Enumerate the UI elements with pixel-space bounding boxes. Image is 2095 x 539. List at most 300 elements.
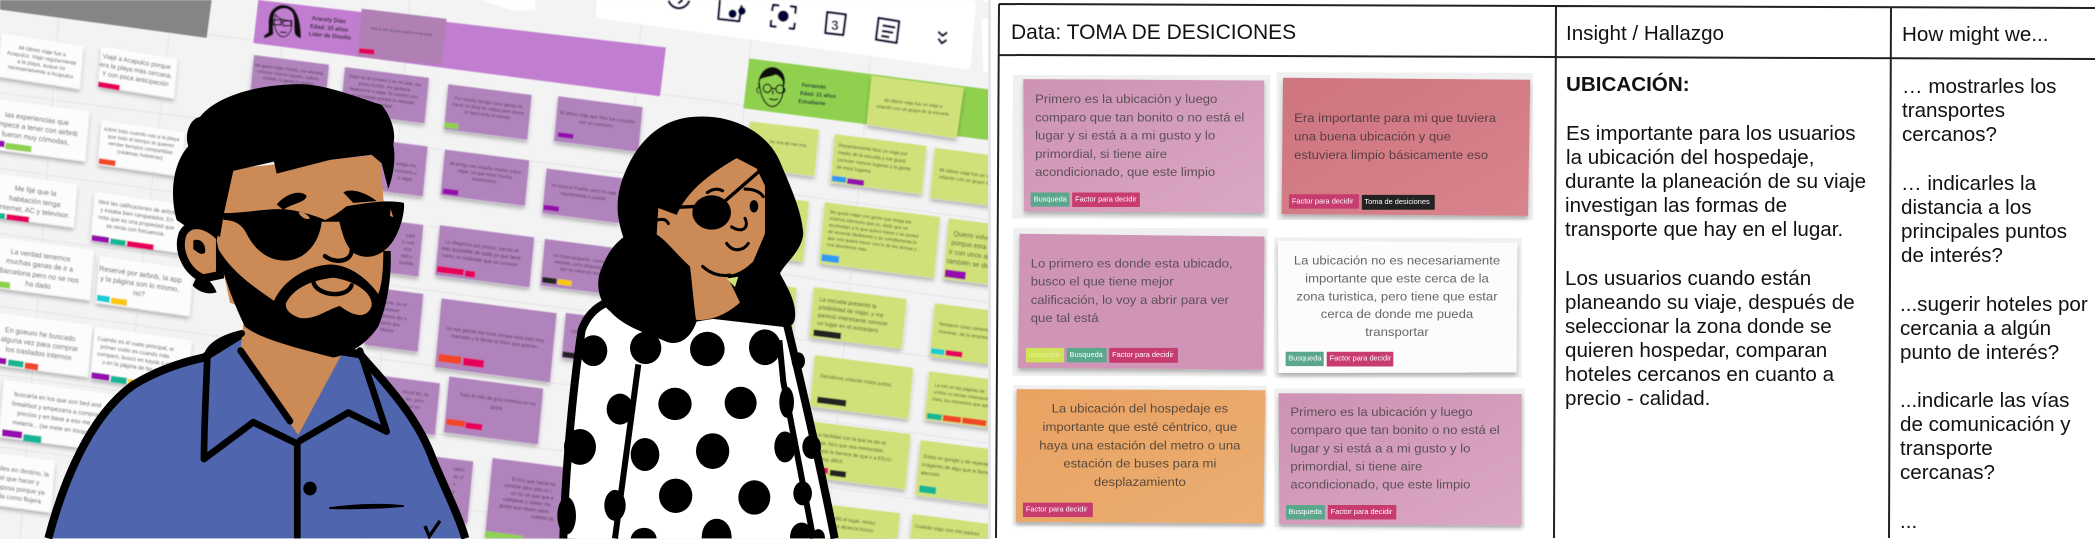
sticky note: purple P2: gusta mucho, me gustaría xyxy=(358,81,411,93)
sticky note: green G9: Rentaron unas camionetas para xyxy=(939,321,1008,336)
man: neck xyxy=(240,323,360,435)
sticky note: purple Q3: que la cama es muy xyxy=(559,266,602,278)
sticky note: purple P6: nda y xyxy=(401,253,413,260)
quote card 6: acondicionado, que este limpio xyxy=(1290,478,1470,491)
sticky note: white A7: des en destino, la xyxy=(0,465,50,479)
sticky note: green G3: Mi último viaje fue un viaje a xyxy=(939,167,1001,181)
how might we text: principales puntos xyxy=(1901,220,2067,243)
persona banner: Fernando xyxy=(743,58,989,140)
sticky note: purple P3 xyxy=(444,84,532,140)
sticky note: purple P3: lo hace todo el mundo xyxy=(464,109,511,121)
sticky note: purple P12: do el xyxy=(453,474,464,481)
sticky note: purple Q1: por un concierto. xyxy=(579,119,614,130)
illustration: man with sunglasses xyxy=(48,84,465,538)
sticky note: green G12: La facilidad con la que se dio el xyxy=(816,432,886,447)
quote card 5: La ubicación del hospedaje es xyxy=(1052,402,1228,415)
persona banner: Fernando: Estudiante xyxy=(798,99,826,107)
man: collar and shirt lines xyxy=(204,333,387,538)
quote card 4: zona turistica, pero tiene que estar xyxy=(1296,290,1498,303)
quote card 4: La ubicación no es necesariamente xyxy=(1294,254,1500,268)
sticky note: white A5 xyxy=(0,313,93,377)
sticky note: green G2: conocer nuevos lugares y la gente xyxy=(837,157,911,173)
quote card 5: importante que esté céntrico, que xyxy=(1043,421,1237,434)
sticky note: purple P2: para viajar. xyxy=(371,101,394,109)
sticky note: purple P13: gusta que vayan parto xyxy=(499,503,549,515)
sticky note: white A4: Barcelona pero no se nos xyxy=(0,266,79,285)
sticky note: green G7 xyxy=(752,283,797,339)
sticky note: purple P1: Me gusta viajar mucho, me encanta xyxy=(255,62,324,76)
sticky note: purple P7: más accesible de cada ya que tiene xyxy=(441,246,521,262)
sticky note: green G15: Cuando viajo con mis padres xyxy=(914,523,980,538)
quote card 4: Factor para decidir xyxy=(1330,355,1392,363)
sticky note: green G5: acomodan a lo que quiero hacer o se ponen xyxy=(829,222,919,239)
persona banner: Aracely: Aracely Días xyxy=(311,16,346,25)
column header: Insight: Insight / Hallazgo xyxy=(1566,22,1724,45)
sticky note: green G11 xyxy=(925,371,1019,431)
sticky note: purple P2: dedicarme a viajar. El número uno xyxy=(349,86,418,100)
quote card 3: Lo primero es donde esta ubicado, xyxy=(1031,257,1233,270)
insight text: quieren hospedar, comparan xyxy=(1565,339,1827,362)
sticky note: white A1: a la playa, auque no xyxy=(17,59,65,72)
woman: facial lines xyxy=(657,189,763,275)
sticky note: green G5: mismos intereses que yo, dado que se xyxy=(829,216,909,231)
quote card 2: una buena ubicación y que xyxy=(1294,130,1451,143)
avatar: Fernando line drawing xyxy=(757,67,785,107)
sticky note: purple P7: Lo elegimos por precio, siendo el xyxy=(445,239,519,255)
sticky note: purple P9: no nos gustan los tours porque esta todo muy xyxy=(446,326,545,344)
sticky note: green G2: de esos lugares xyxy=(836,164,871,175)
sticky note: purple P5: Mi amigo me enseña mucho sobre xyxy=(449,161,522,176)
sticky note: purple P8: urar, ya no xyxy=(385,300,408,309)
sticky note: green G12 xyxy=(805,421,911,489)
sticky note: purple P8: distrito xyxy=(380,327,394,335)
how might we text: punto de interés? xyxy=(1900,341,2059,364)
quote card 1 xyxy=(1012,75,1270,219)
sticky note: purple Q4 xyxy=(562,313,593,361)
sticky note: white A2 xyxy=(0,99,89,161)
sticky note: white A5: En goeuro he buscado xyxy=(5,326,76,343)
sticky note: green G2 xyxy=(830,134,927,194)
quote card 3 xyxy=(1012,228,1268,376)
sticky note: green G3 xyxy=(928,147,988,211)
sticky note: green G8: pareció interesante conocer xyxy=(818,313,888,328)
sticky note: purple P11: gusta. xyxy=(490,404,504,412)
sticky note: white B5: o en la página de las aero xyxy=(102,360,165,375)
sticky note: purple P9: marcado y te llevan al ritmo que quieren. xyxy=(451,333,539,350)
quote card 5: Factor para decidir xyxy=(1026,506,1088,513)
sticky note: purple P3: Por mucho tiempo tuve ganas de xyxy=(454,96,523,111)
quote card 5 xyxy=(1012,385,1267,527)
sticky note: purple P13: El frío que hacía ha xyxy=(512,477,556,488)
sticky note: white B3: se renta con frecuencia. xyxy=(106,224,165,238)
how might we text: de interés? xyxy=(1901,244,2003,267)
sticky note: white A5: alguna vez para comprar xyxy=(0,335,79,353)
insight text: Los usuarios cuando están xyxy=(1565,267,1811,290)
quote card 6: lugar y si está a a mi gusto y lo xyxy=(1290,442,1470,455)
quote card 3: busco el que tiene mejor xyxy=(1031,275,1174,289)
sticky note: purple P13: callejeras y saben mu xyxy=(502,496,552,509)
sticky note: purple Q1: El último viaje que hice fue a puebla xyxy=(560,110,635,126)
column header: How might we: How might we... xyxy=(1902,23,2048,46)
sticky note: green G6: Quiero volver a xyxy=(953,231,999,243)
sticky note: green G6: también se divierten xyxy=(946,258,1007,273)
sticky note: purple P6: o cual xyxy=(402,239,415,247)
sticky note: purple P9 xyxy=(435,298,557,382)
sticky note: purple P8 xyxy=(364,287,423,352)
quote card 5: estación de buses para mi xyxy=(1063,457,1216,470)
how might we text: ... xyxy=(1900,510,1917,533)
sticky note: purple P6: una xyxy=(403,247,412,253)
quote card 4 xyxy=(1274,237,1522,377)
sticky note: green G13: Estás en google y de repente te xyxy=(923,454,995,469)
sticky note: purple P10: list, pero xyxy=(406,396,424,405)
persona banner: Fernando: Fernando xyxy=(801,83,827,91)
sticky note: purple Q3 xyxy=(540,239,620,295)
sticky note: purple P10: iar en xyxy=(408,404,420,411)
sticky note: purple Q3: Un hotel pequeño. Lleno de xyxy=(553,253,611,266)
sticky note: purple Q2 xyxy=(542,168,623,223)
woman: polka dots xyxy=(557,329,825,538)
sticky note: white B4: no? xyxy=(133,289,145,299)
woman: face and neck xyxy=(657,158,765,320)
sticky note: green G15 xyxy=(910,514,999,539)
sticky note: purple P1 xyxy=(248,54,331,90)
sticky note: purple P4: s viajar xyxy=(397,175,413,183)
woman: hair xyxy=(598,116,803,343)
sticky note: green G1: es una de mis tres xyxy=(770,139,807,148)
insight text: la ubicación del hospedaje, xyxy=(1566,146,1814,169)
persona banner: Fernando: orlando con un grupo de la escuela xyxy=(876,104,950,118)
sticky note: green G4 xyxy=(786,199,811,267)
man: ear xyxy=(181,225,220,278)
sticky note: white B2: vender tiempos compartidas xyxy=(108,141,173,156)
sticky note: green G6: ir con unos amigos xyxy=(949,249,1006,263)
quote card 1: lugar y si está a a mi gusto y lo xyxy=(1035,129,1215,142)
sticky note: green G13: imágenes de algo que te llame la xyxy=(921,462,995,477)
quote card 3: Factor para decidir xyxy=(1112,351,1174,359)
quote card 6: Factor para decidir xyxy=(1331,508,1393,516)
sticky note: green G5: que uno quiere hacer con lo de los demas y xyxy=(827,235,917,252)
sticky note: green G14: y si no alcanza busco xyxy=(825,523,873,534)
sticky note: purple P13 xyxy=(485,458,580,539)
sticky note: purple P12: e xyxy=(452,490,455,495)
sticky note: purple P4: concierto y xyxy=(394,168,418,177)
sticky note: white B5: comparo, busco en kayak o sa xyxy=(97,351,173,368)
sticky note: green G2: Recientemente hice un viaje por xyxy=(838,143,908,158)
sticky note: white A6: buscaría en los que son bed and xyxy=(14,391,102,410)
quote card 5: haya una estación del metro o una xyxy=(1039,439,1241,452)
man: pocket line xyxy=(329,505,404,508)
sticky note: purple Q3: encanto, pero después de xyxy=(554,259,609,272)
sticky note: white A1: Acapulco. Viajo regularmente xyxy=(7,50,77,67)
sticky note: purple P6: puebla xyxy=(399,260,414,267)
sticky note: white A4: La verdad tenemos xyxy=(10,248,71,264)
sticky note: green G9 xyxy=(930,303,1022,368)
panel: whiteboard screenshot xyxy=(0,0,1042,539)
quote card 3: Busqueda xyxy=(1070,351,1103,359)
sticky note: purple P13: ponche pero allá no t xyxy=(504,483,552,495)
sticky note: white B1 xyxy=(98,46,177,99)
sticky note: white A2: las experiencias que xyxy=(5,111,69,127)
sticky note: green G8 xyxy=(809,287,907,349)
sticky note: green G10 xyxy=(810,355,913,419)
sticky note: green G5 xyxy=(819,202,940,278)
sticky note: white B1: Y con poca anticipación xyxy=(102,70,169,88)
sticky note: purple P5: viajar, ya que tiene mucha xyxy=(457,168,512,181)
sticky note: white B2: que todo el tiempo te quieren xyxy=(107,134,175,150)
sticky note: purple Q1 xyxy=(554,96,643,152)
sticky note: white A7 xyxy=(0,452,55,512)
sticky note: purple P11: Todo el rollo de guía turística no me xyxy=(459,392,536,408)
how might we text: de comunicación y xyxy=(1900,413,2071,436)
quote card 6: Busqueda xyxy=(1289,508,1322,516)
quote card 6 xyxy=(1274,388,1525,528)
quote card 3: que tal está xyxy=(1031,312,1099,325)
sticky note: green G12: Limpió la barrera de que ir a EEUU xyxy=(814,448,892,464)
how might we text: cercania a algún xyxy=(1900,317,2051,340)
sticky note: purple P2: Viajar es el número 2 en mi vida, me xyxy=(348,73,422,88)
woman: eye patch xyxy=(692,195,731,230)
how might we text: … indicarles la xyxy=(1901,172,2037,195)
man: glasses highlight xyxy=(299,209,393,219)
sticky note: purple P12 xyxy=(436,456,475,528)
man: sunglasses xyxy=(223,201,404,261)
sticky note: purple P8: hemos ido a xyxy=(381,313,407,322)
sticky note: white A5: los traslados internos xyxy=(5,345,72,362)
man: mouth area xyxy=(286,278,372,318)
sticky note: white B2: sobre todo cuando vas a la playa xyxy=(104,126,180,143)
quote card 6: comparo que tan bonito o no está el xyxy=(1290,424,1500,437)
sticky note: purple P4 xyxy=(340,136,428,196)
table grid xyxy=(996,4,2095,538)
quote card 2: estuviera limpio básicamente eso xyxy=(1294,148,1488,162)
sticky note: white A4: muchas ganas de ir a xyxy=(6,257,74,274)
sticky note: purple P11 xyxy=(444,376,543,444)
sticky note: green G11: clara, los impuestos que aplican xyxy=(932,396,997,409)
sticky note: white B5 xyxy=(90,327,192,394)
sticky note: purple Q2: Ya conocía Puebla, pero mi viaje xyxy=(550,182,617,196)
quote card 1: acondicionado, que este limpio xyxy=(1035,165,1215,179)
man: mouth line xyxy=(313,282,352,294)
quote card 2: Factor para decidir xyxy=(1292,198,1354,205)
woman: patch strap xyxy=(677,171,759,207)
sticky note: green G8: posibilidad de viajar, y me xyxy=(818,305,884,319)
sticky note: green G2: medio de la escuela y me gustó xyxy=(838,150,906,165)
how might we text: ...indicarle las vías xyxy=(1900,389,2069,412)
man: hair xyxy=(173,84,394,237)
man: eyebrows xyxy=(277,190,377,210)
quote card 2 xyxy=(1277,72,1533,220)
sticky note: white A4 xyxy=(0,237,94,300)
sticky note: white B4 xyxy=(96,256,193,316)
sticky note: purple P1: conocer nuevos lugares, cultura, xyxy=(257,68,320,82)
sticky note: green G5: de acuerdo fácilmente y se complementa lo xyxy=(828,229,917,245)
quote card 6: Primero es la ubicación y luego xyxy=(1290,405,1473,419)
board edge xyxy=(988,0,991,539)
sticky note: purple P12: e xyxy=(453,482,456,488)
sticky note: white A3: habitación tenga xyxy=(9,194,61,209)
sticky note: purple P5: experiencia. xyxy=(471,176,497,185)
persona banner: Fernando: Edad: 21 años xyxy=(800,91,836,100)
sticky note: white A6: breakfast y empezaría a comprar xyxy=(12,400,100,419)
quote card 1: Factor para decidir xyxy=(1075,196,1137,203)
toolbar icons xyxy=(669,0,947,43)
how might we text: ...sugerir hoteles por xyxy=(1900,293,2088,316)
sticky note: purple P8: turistear xyxy=(382,306,400,315)
insight text: transporte que hay en el lugar. xyxy=(1565,218,1843,241)
quote card 6: primordial, si tiene aire xyxy=(1290,460,1422,473)
quote card 4: cerca de donde me pueda xyxy=(1321,307,1474,321)
sticky note: green G1 xyxy=(745,121,819,176)
sticky note: white B5: Cuando es el vuelo principal, el xyxy=(97,336,174,353)
man: beard xyxy=(217,246,391,358)
sticky note: green G12: viaje, hizo que sea memorable. xyxy=(815,440,885,455)
toolbar xyxy=(480,0,989,73)
how might we text: cercanos? xyxy=(1902,123,1997,146)
panel: research table xyxy=(996,4,2095,538)
sticky note: purple P12: saber xyxy=(453,466,466,474)
sticky note: purple P1: comida, la gente la verdad xyxy=(262,75,314,87)
sticky note: purple P4: amigo me xyxy=(396,161,417,170)
how might we text: … mostrarles los xyxy=(1902,75,2056,98)
sticky note: white A3: Me fijé que la xyxy=(14,184,57,198)
illustration: woman with eye patch xyxy=(557,116,835,538)
sticky note: white B1: Viajé a Acapulco porque xyxy=(102,53,171,71)
quote cards xyxy=(1012,72,1533,528)
sticky note: green G12: es muy difícil. xyxy=(813,455,844,465)
sticky note: green G6: porque esta muy xyxy=(951,240,1002,253)
sticky note: green G11: unidos no tenían información xyxy=(933,389,992,402)
sticky note: purple P7: como un estándar que ya conocer. xyxy=(442,253,519,269)
sticky note: white B1: era la playa más cercana. xyxy=(100,61,173,80)
quote card 4: transportar xyxy=(1365,325,1429,339)
sticky note: purple P6: está xyxy=(406,233,415,240)
sticky note: white A6 xyxy=(0,380,114,452)
sticky note: purple P10 xyxy=(384,376,442,440)
sticky note: green G8: un lugar en el extranjero xyxy=(817,321,878,335)
quote card 4: Busqueda xyxy=(1288,355,1322,363)
sticky note: white B3 xyxy=(91,192,192,255)
sticky note: purple P8: tenía que xyxy=(380,320,401,329)
sticky note: white A7: el que hacer y xyxy=(0,474,40,487)
woman: eye xyxy=(750,200,758,212)
sticky note: green G9: moverse, de la empresa que xyxy=(938,329,1000,343)
insight text: planeando su viaje, después de xyxy=(1565,291,1855,314)
sticky note: white A1: necesariamente a Acapulco xyxy=(8,64,73,81)
sticky note: white A6: metería... (se mete en trivago) xyxy=(12,419,93,437)
quote card 1: Primero es la ubicación y luego xyxy=(1035,93,1217,106)
how might we text: transportes xyxy=(1902,99,2005,122)
sticky note: white B5: primer vuelo es cuando más xyxy=(100,344,170,360)
quote card 1: primordial, si tiene aire xyxy=(1035,147,1167,161)
sticky note: purple P7 xyxy=(435,225,534,287)
quote card 2: Era importante para mi que tuviera xyxy=(1294,111,1497,125)
sticky note: green G6 xyxy=(943,218,1042,291)
how might we text: distancia a los xyxy=(1901,196,2032,219)
quote card 2: Toma de desiciones xyxy=(1364,198,1430,206)
how might we text: transporte xyxy=(1900,437,1993,460)
sticky note: green G14: decidió el lugar, reviso xyxy=(826,515,876,527)
man: button xyxy=(303,482,317,495)
sticky note: white A4: ha dado xyxy=(25,280,51,291)
insight text: Es importante para los usuarios xyxy=(1566,122,1856,145)
sticky note: green G3: orlando con un grupo de la escuela xyxy=(939,174,1015,190)
man: face xyxy=(217,155,388,330)
quote card 3: ubicación xyxy=(1028,351,1060,359)
how might we text: cercanas? xyxy=(1900,461,1995,484)
sticky note: purple Q4: Dep xyxy=(571,329,581,336)
sticky note: white B4: Reservé por airbnb, la app xyxy=(99,265,182,285)
sticky note: green G5: Me gusta viajar con gente que tenga los xyxy=(830,209,912,225)
sticky note: green G1: ades xyxy=(763,144,773,150)
sticky note: purple P2: es el trabajo porque lo necesito xyxy=(352,92,415,106)
insight text: durante la planeación de su viaje xyxy=(1565,170,1866,193)
sticky note: white B2 xyxy=(98,120,185,176)
persona banner: Fernando: Mi último viaje fue un viaje a xyxy=(884,98,943,110)
man: ear detail xyxy=(193,240,217,293)
avatar: Aracely line drawing xyxy=(264,5,301,38)
insight text: investigan las formas de xyxy=(1565,194,1787,217)
sticky note: white A1 xyxy=(0,33,83,89)
sticky note: white A1: Mi último viaje fue a xyxy=(19,45,67,59)
man: shirt xyxy=(48,335,465,538)
sticky note: purple P13: vuelven la xyxy=(530,514,554,523)
persona banner: Aracely: Todo el rollo de guía turística no me gusta. xyxy=(370,26,433,37)
quote card 1: Busqueda xyxy=(1034,196,1067,203)
sticky note: green G13 xyxy=(915,440,1012,507)
quote card 3: calificación, lo voy a abrir para ver xyxy=(1031,293,1229,307)
insight text: hoteles cercanos en cuanto a xyxy=(1565,363,1835,386)
sticky note: green G14 xyxy=(817,504,900,539)
sticky note: white B3: nota que es una propiedad que xyxy=(98,215,174,232)
sticky note: green G8: La escuela presentó la xyxy=(819,297,877,310)
quote card 4: importante que este cerca de la xyxy=(1305,272,1490,285)
sticky note: purple P2 xyxy=(341,67,429,123)
quote card 1: comparo que tan bonito o no está el xyxy=(1035,111,1244,124)
persona banner: Aracely xyxy=(253,0,666,96)
toolbar icons: 3 xyxy=(831,18,839,33)
sticky note: purple P13: un no se que que e xyxy=(510,490,554,502)
man: check mark xyxy=(425,521,440,536)
sticky note: white B3: Miré las calificaciones de airbnb xyxy=(98,199,177,217)
grey header block xyxy=(0,0,212,38)
sticky note: green G5: nos divertimos mas xyxy=(827,242,867,252)
sticky note: white B3: y estaba bien ranqueados. En xyxy=(100,207,173,224)
insight text: seleccionar la zona donde se xyxy=(1565,315,1832,338)
woman: dress xyxy=(563,303,835,538)
sticky note: green G13: atención xyxy=(920,470,940,479)
sticky note: purple P5 xyxy=(441,150,529,206)
sticky note: purple P3: hacer un blog de viajes pero ahora xyxy=(452,102,525,117)
persona banner: Aracely: Líder de Diseño xyxy=(308,31,352,42)
sticky note: white A2: fueron muy cómodas, xyxy=(1,130,69,147)
column header: Data: Data: TOMA DE DESICIONES xyxy=(1011,21,1296,44)
woman: top collar sliver xyxy=(727,277,738,287)
persona banner: Aracely: Edad: 33 años xyxy=(310,24,348,34)
sticky note: white A6: precios y en base a eso me xyxy=(17,410,91,427)
sticky note: green G11: La info en las páginas de xyxy=(934,383,985,394)
insight text: precio - calidad. xyxy=(1565,387,1710,410)
man: nose xyxy=(325,222,352,261)
sticky note: white B2: (cadenas hoteleras) xyxy=(117,149,163,162)
sticky note: purple P6 xyxy=(387,222,425,282)
woman: sleeve lines xyxy=(615,340,813,538)
sticky note: purple P10: check list, mi xyxy=(402,389,429,399)
sticky note: white A3 xyxy=(0,174,77,228)
sticky note: white B4: y la página son lo mismo, xyxy=(100,274,180,294)
sticky note: purple Q2: regularmente a puebla xyxy=(560,191,606,201)
quote card 5: desplazamiento xyxy=(1094,475,1186,489)
